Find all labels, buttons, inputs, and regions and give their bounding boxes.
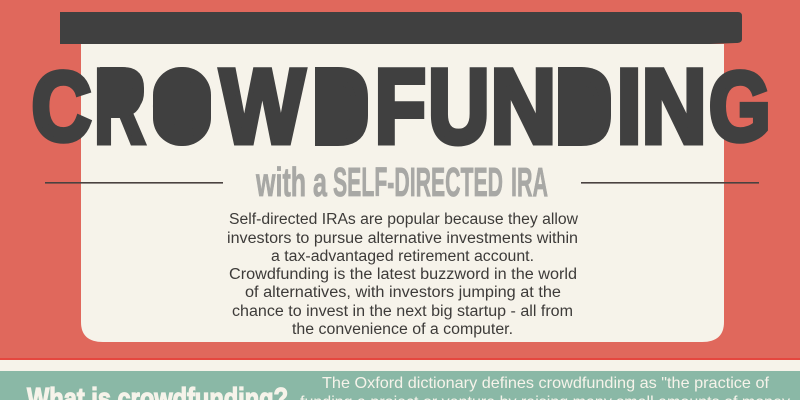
right rule bbox=[581, 182, 759, 184]
title: CROWDFUNDING: C bbox=[32, 53, 91, 162]
intro paragraph: Self-directed IRAs are popular because they allow bbox=[229, 211, 579, 228]
intro paragraph: a tax-advantaged retirement account. bbox=[271, 248, 534, 265]
cream separator band bbox=[0, 360, 800, 371]
definition text bbox=[300, 375, 790, 400]
subtitle: with a SELF-DIRECTED IRA: with a bbox=[255, 159, 328, 205]
subtitle: with a SELF-DIRECTED IRA: SELF-DIRECTED bbox=[333, 159, 503, 205]
intro paragraph: the convenience of a computer. bbox=[292, 321, 513, 338]
title: CROWDFUNDING: O bbox=[152, 52, 212, 161]
title: CROWDFUNDING: D bbox=[555, 48, 612, 165]
definition text: The Oxford dictionary defines crowdfunding as "the practice of bbox=[322, 375, 770, 392]
title: CROWDFUNDING: W bbox=[220, 48, 305, 165]
subtitle: with a SELF-DIRECTED IRA bbox=[255, 159, 548, 205]
teal section band bbox=[0, 371, 800, 400]
intro paragraph: investors to pursue alternative investments within bbox=[227, 230, 578, 247]
red divider stripe bbox=[0, 358, 800, 360]
subtitle: with a SELF-DIRECTED IRA: IRA bbox=[511, 159, 548, 205]
left rule bbox=[45, 182, 223, 184]
dark lid bar bbox=[60, 12, 742, 44]
title: CROWDFUNDING: D bbox=[312, 48, 369, 165]
cream card bbox=[81, 44, 724, 342]
intro paragraph: of alternatives, with investors jumping at the bbox=[245, 284, 561, 301]
title: CROWDFUNDING bbox=[32, 47, 771, 166]
title: CROWDFUNDING: U bbox=[428, 49, 489, 166]
intro paragraph bbox=[227, 211, 579, 338]
title: CROWDFUNDING: I bbox=[617, 48, 642, 165]
title: CROWDFUNDING: N bbox=[642, 48, 707, 165]
title: CROWDFUNDING: R bbox=[94, 47, 145, 165]
title: CROWDFUNDING: N bbox=[490, 47, 556, 165]
intro paragraph: chance to invest in the next big startup - all from bbox=[232, 303, 573, 320]
intro paragraph: Crowdfunding is the latest buzzword in the world bbox=[229, 266, 577, 283]
title: CROWDFUNDING: G bbox=[709, 52, 771, 161]
title: CROWDFUNDING: F bbox=[375, 49, 426, 166]
